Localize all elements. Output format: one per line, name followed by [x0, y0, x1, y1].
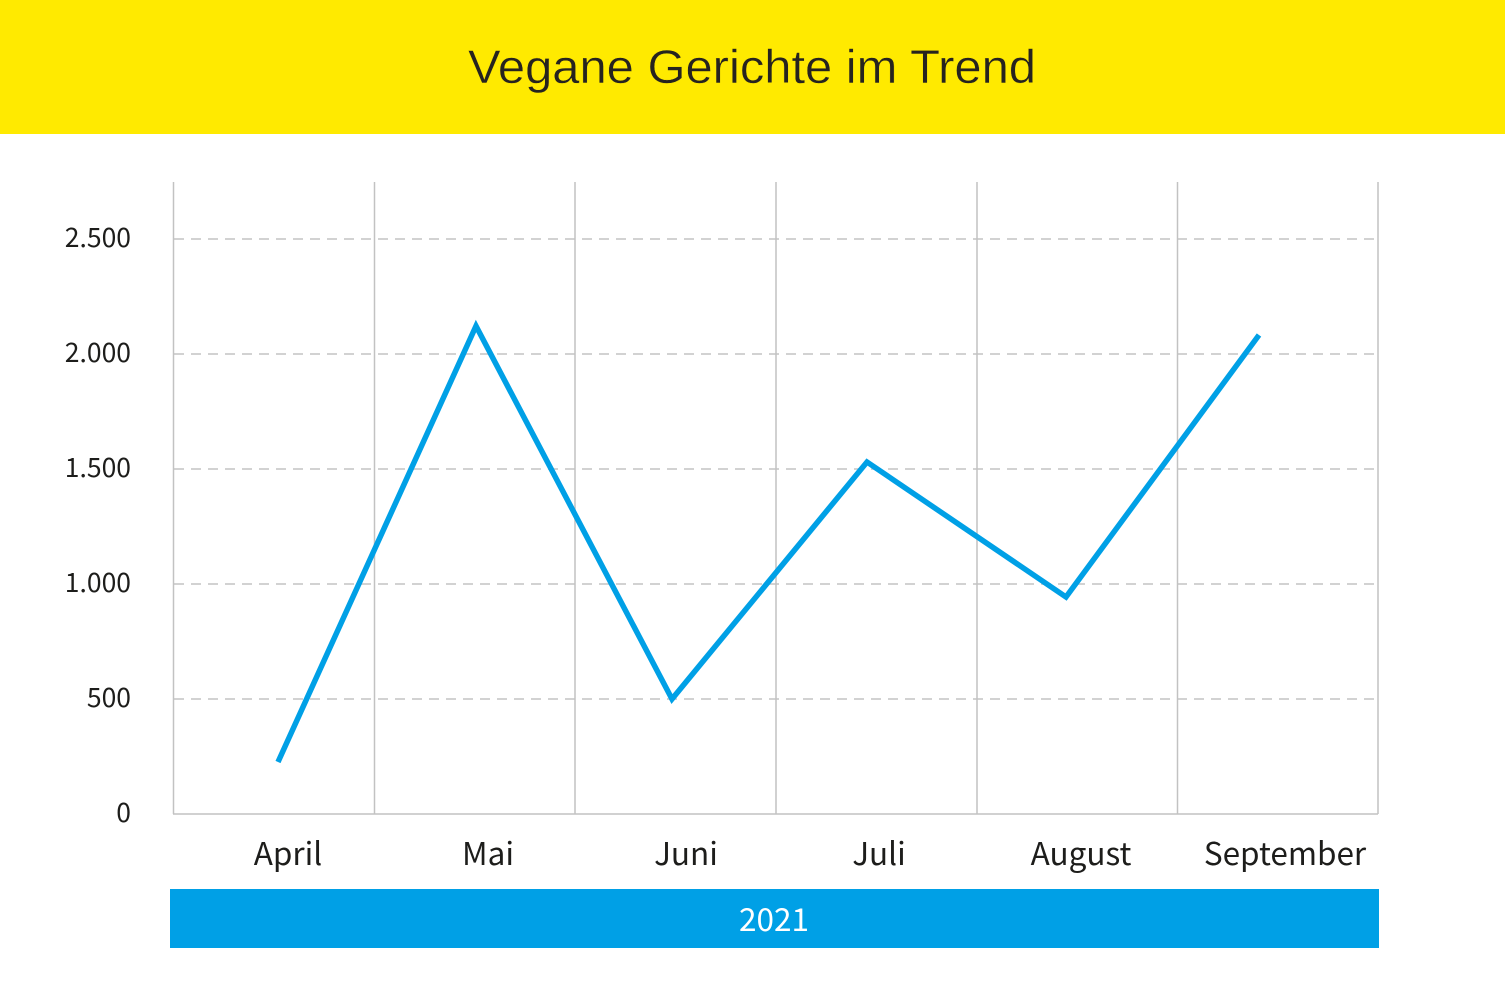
x-axis month labels: August [1031, 829, 1132, 875]
y-axis labels: 500 [87, 676, 131, 715]
year bar [170, 889, 1379, 948]
y-axis labels: 1.500 [65, 446, 131, 485]
x-axis month labels: Juli [852, 829, 906, 875]
x-axis month labels: September [1204, 829, 1367, 875]
title: Vegane Gerichte im Trend [468, 40, 1036, 93]
header banner [0, 0, 1505, 134]
y-axis labels [65, 216, 131, 830]
horizontal dashed grid lines [174, 239, 1378, 699]
line chart [65, 182, 1378, 875]
vertical grid lines and axes [173, 182, 1378, 814]
y-axis labels: 2.000 [65, 331, 131, 370]
y-axis labels: 2.500 [65, 216, 131, 255]
x-axis month labels: Juni [654, 829, 718, 875]
year label: 2021 [739, 895, 809, 941]
x-axis month labels [254, 829, 1367, 875]
x-axis month labels: April [254, 829, 322, 875]
y-axis labels: 0 [116, 791, 131, 830]
data line [278, 326, 1259, 762]
y-axis labels: 1.000 [65, 561, 131, 600]
x-axis month labels: Mai [462, 829, 514, 875]
